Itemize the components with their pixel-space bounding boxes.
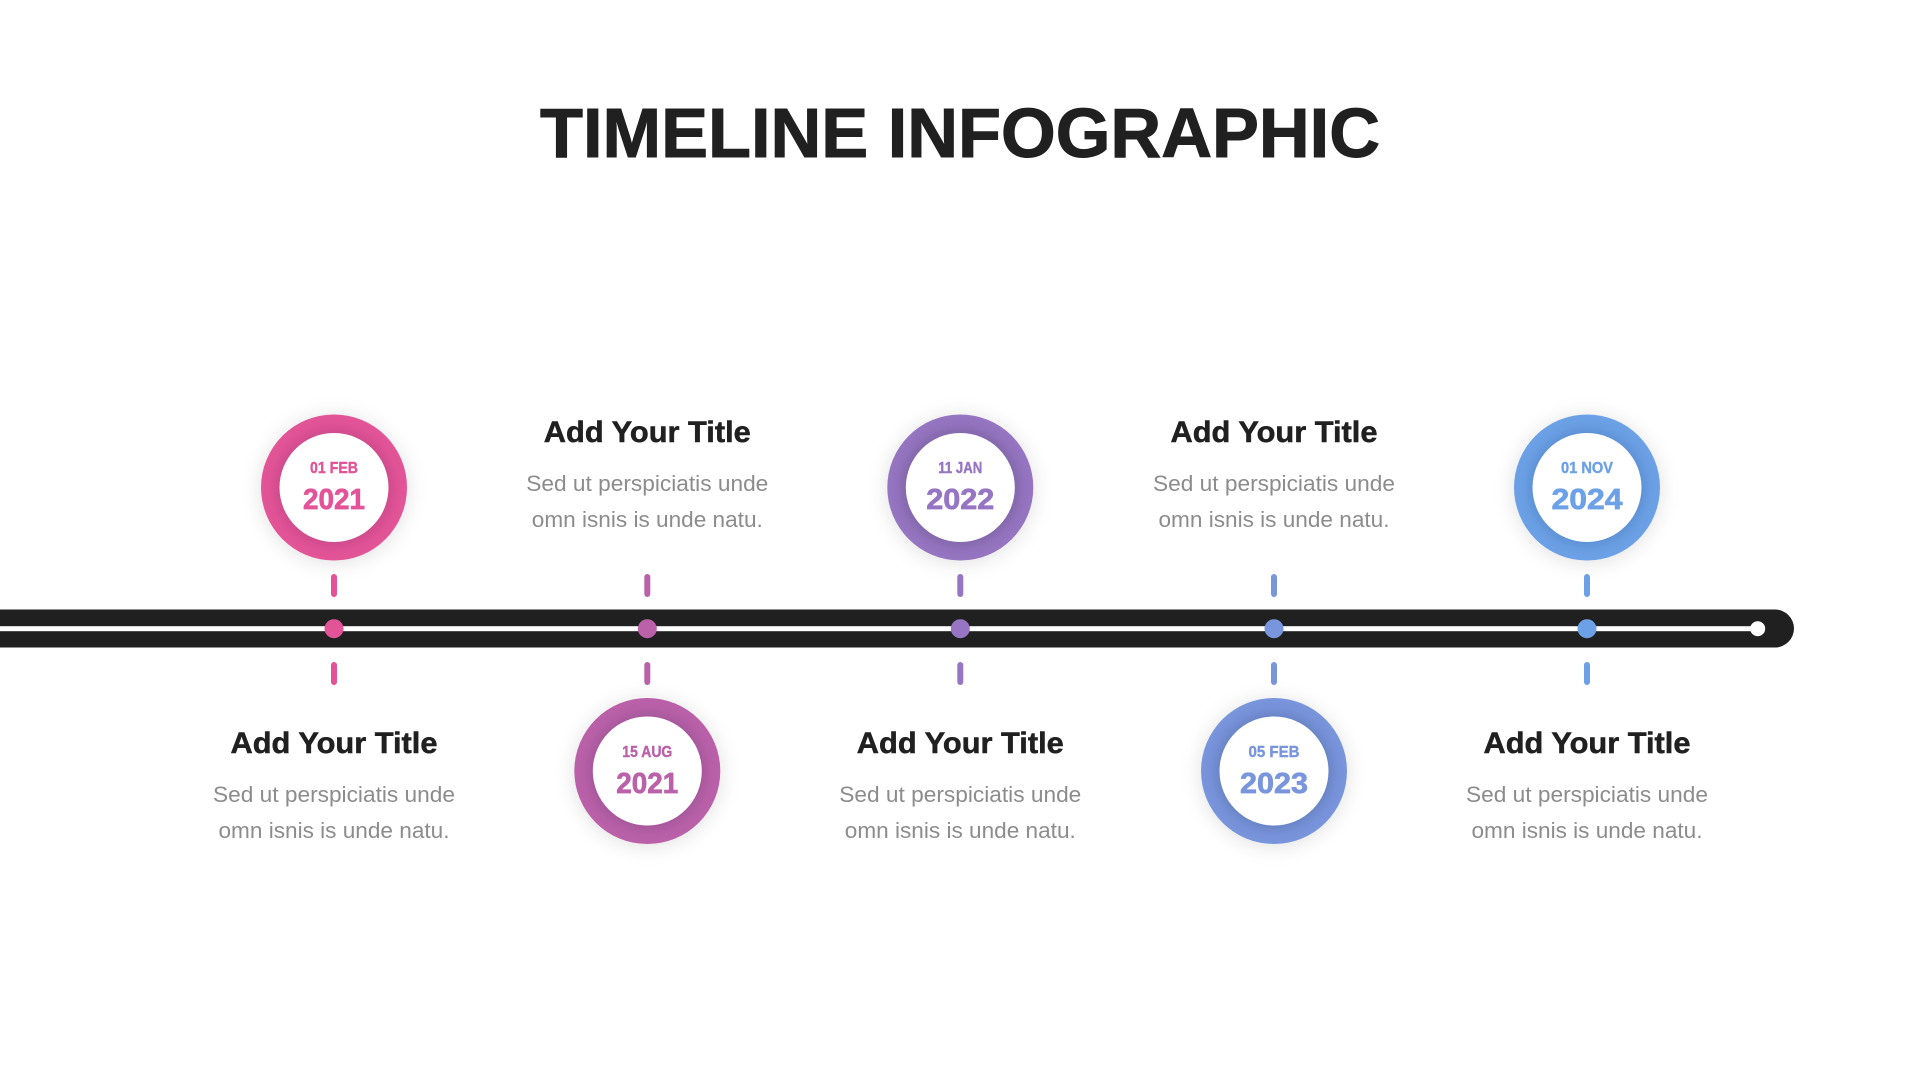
date badge 2: 15 AUG <box>622 744 672 761</box>
date badge 3: 2022 <box>926 484 994 516</box>
connector ticks and dot 3 <box>951 574 970 685</box>
text block 2: Sed ut perspiciatis unde <box>526 471 768 496</box>
text block 4: Add Your Title <box>1170 416 1378 449</box>
date badge 1: 2021 <box>303 484 365 516</box>
date badge 2 <box>574 698 720 844</box>
text block 2 <box>526 416 768 532</box>
text block 5: Sed ut perspiciatis unde <box>1466 782 1708 807</box>
date badge 3 <box>887 414 1033 560</box>
text block 3: Sed ut perspiciatis unde <box>839 782 1081 807</box>
date badge 5 <box>1514 414 1660 560</box>
text block 1: Add Your Title <box>230 727 438 760</box>
milestone 5: 01 Nov 2024 <box>1466 414 1708 843</box>
connector ticks and dot 1 <box>324 574 344 685</box>
date badge 4 <box>1201 698 1347 844</box>
text block 4 <box>1153 416 1395 532</box>
connector ticks and dot 5 <box>1578 574 1596 685</box>
text block 5 <box>1466 727 1708 843</box>
date badge 4: 2023 <box>1240 768 1308 800</box>
date badge 1: 01 FEB <box>310 460 358 477</box>
date badge 3: 11 JAN <box>938 460 982 477</box>
text block 1: omn isnis is unde natu. <box>218 818 450 843</box>
text block 4: Sed ut perspiciatis unde <box>1153 471 1395 496</box>
text block 1 <box>213 727 455 843</box>
text block 5: omn isnis is unde natu. <box>1472 818 1702 843</box>
text block 3: Add Your Title <box>857 727 1064 760</box>
connector ticks and dot 2 <box>638 574 657 685</box>
timeline bar <box>0 610 1794 648</box>
text block 3 <box>839 727 1081 843</box>
milestone 1: 01 Feb 2021 <box>213 414 455 843</box>
date badge 4: 05 FEB <box>1248 744 1300 761</box>
text block 3: omn isnis is unde natu. <box>845 818 1076 843</box>
milestone 3: 11 Jan 2022 <box>839 414 1081 843</box>
text block 2: omn isnis is unde natu. <box>532 507 763 532</box>
milestone 2: 15 Aug 2021 <box>526 416 768 844</box>
connector ticks and dot 4 <box>1264 574 1284 685</box>
date badge 5: 01 NOV <box>1561 460 1614 477</box>
text block 2: Add Your Title <box>544 416 751 449</box>
text block 5: Add Your Title <box>1484 727 1690 760</box>
text block 1: Sed ut perspiciatis unde <box>213 782 455 807</box>
title: TIMELINE INFOGRAPHIC <box>540 94 1380 172</box>
milestone 4: 05 Feb 2023 <box>1153 416 1395 844</box>
date badge 5: 2024 <box>1552 484 1622 516</box>
text block 4: omn isnis is unde natu. <box>1158 507 1390 532</box>
date badge 2: 2021 <box>616 768 678 800</box>
date badge 1 <box>261 414 407 560</box>
